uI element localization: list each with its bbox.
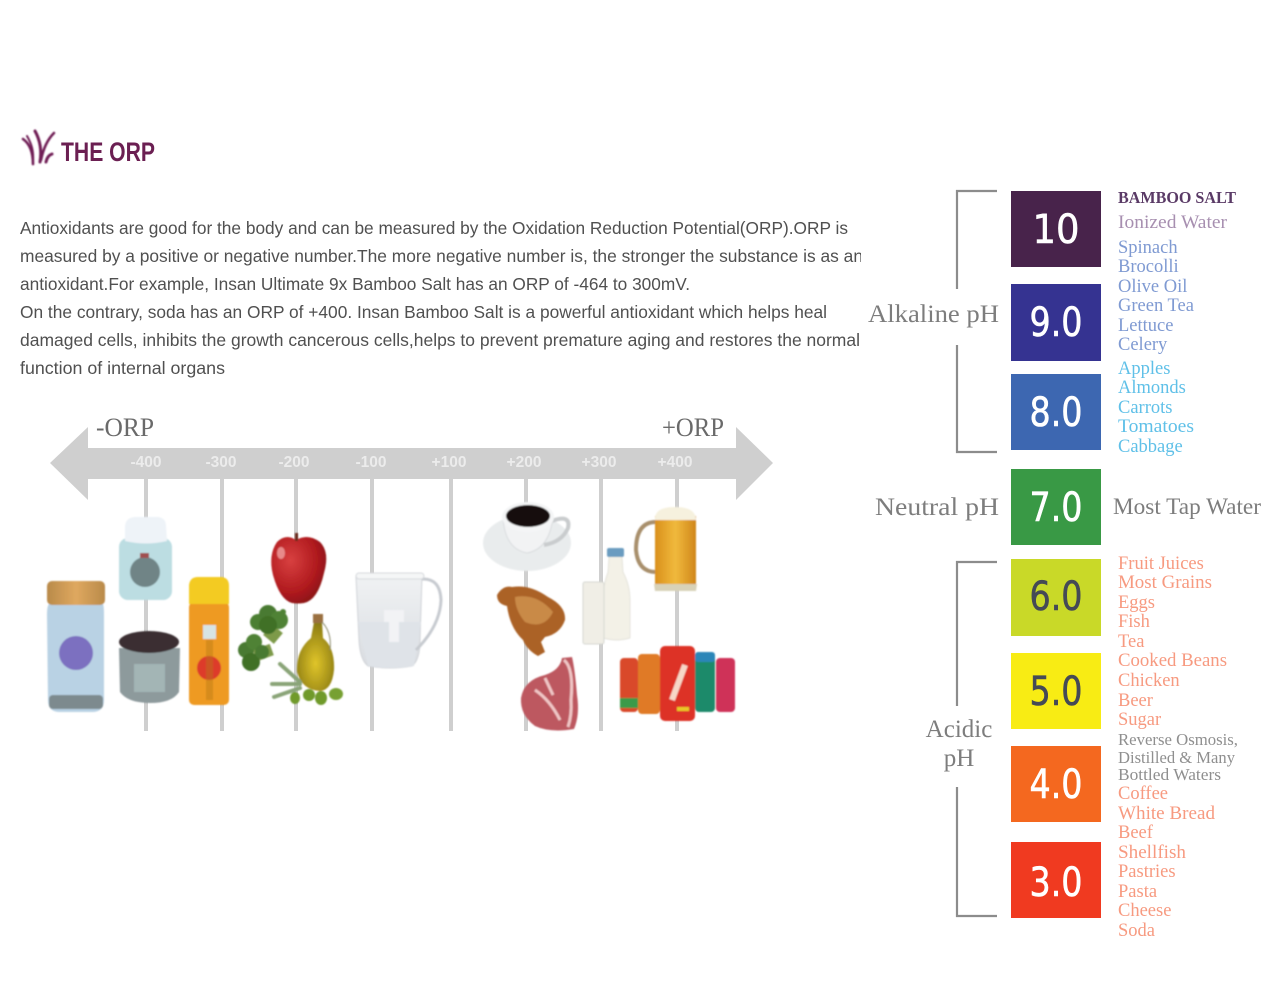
list: pH 8 items: Almonds: [1118, 378, 1186, 398]
list: pH 9 items: Green Tea: [1118, 296, 1194, 316]
list: pH 8 items: Cabbage: [1118, 437, 1183, 457]
list: pH 9 items: Olive Oil: [1118, 277, 1187, 297]
pH block 9.0: [1011, 284, 1101, 361]
list: bottled waters: Bottled Waters: [1118, 765, 1221, 784]
text block: antioxidant explanation: Antioxidants are good for the body and can be measured by the Oxidation Reduction Potential(ORP).ORP is: [20, 218, 848, 238]
icon: soda cans: [620, 646, 735, 721]
list: bottled waters: Distilled & Many: [1118, 748, 1236, 767]
list: acidic foods upper: Chicken: [1118, 671, 1180, 691]
icon: coffee cup on saucer: [483, 502, 571, 571]
scale numbers: [130, 454, 692, 471]
list: acidic foods lower: Pastries: [1118, 862, 1176, 882]
pH block 9.0: 9.0: [1030, 300, 1082, 346]
bracket: acidic: [957, 562, 997, 916]
pH block 8.0: [1011, 374, 1101, 450]
list: pH 9 items: [1118, 238, 1194, 355]
label: acidic pH: [926, 716, 992, 772]
text block: antioxidant explanation: damaged cells, inhibits the growth cancerous cells,helps to prevent premature aging and restores the normal: [20, 330, 860, 350]
icon: milk bottle and glass: [583, 548, 630, 644]
scale numbers: -300: [205, 454, 237, 471]
scale numbers: -200: [278, 454, 310, 471]
label: acidic pH: pH: [944, 745, 974, 772]
list: acidic foods lower: Soda: [1118, 921, 1155, 941]
list: pH 8 items: Carrots: [1118, 398, 1172, 418]
list: pH 10 items: Ionized Water: [1118, 213, 1227, 233]
text block: antioxidant explanation: On the contrary, soda has an ORP of +400. Insan Bamboo Salt is a powerful antioxidant which helps heal: [20, 302, 827, 322]
pH block 6.0: 6.0: [1030, 574, 1082, 620]
double arrow: [50, 427, 773, 500]
icon: roast chicken: [497, 586, 565, 656]
tick lines: [144, 478, 679, 731]
list: acidic foods lower: Beef: [1118, 823, 1154, 843]
list: acidic foods lower: Pasta: [1118, 882, 1157, 902]
scale numbers: +200: [507, 454, 541, 471]
list: bottled waters: [1118, 730, 1238, 784]
label: most tap water: Most Tap Water: [1113, 494, 1261, 519]
list: pH 9 items: Brocolli: [1118, 257, 1179, 277]
icon: grass leaves: [23, 131, 54, 164]
label: -ORP: -ORP: [96, 413, 154, 442]
list: acidic foods lower: White Bread: [1118, 804, 1216, 824]
scale numbers: +400: [658, 454, 692, 471]
list: acidic foods upper: Beer: [1118, 691, 1153, 711]
bracket: alkaline: [957, 191, 997, 452]
list: pH 8 items: Apples: [1118, 359, 1170, 379]
list: pH 9 items: Celery: [1118, 335, 1168, 355]
heading text: THE ORP: [61, 137, 155, 167]
list: acidic foods lower: [1118, 784, 1216, 941]
list: acidic foods upper: [1118, 554, 1227, 730]
list: bottled waters: Reverse Osmosis,: [1118, 730, 1238, 749]
list: acidic foods upper: Fruit Juices: [1118, 554, 1204, 574]
scale numbers: -400: [130, 454, 162, 471]
pH block 7.0: 7.0: [1030, 485, 1082, 531]
list: pH 9 items: Spinach: [1118, 238, 1178, 258]
list: acidic foods lower: Shellfish: [1118, 843, 1186, 863]
icon: large jar with gold lid: [47, 581, 105, 712]
pH block 3.0: 3.0: [1030, 860, 1082, 906]
list: acidic foods lower: Cheese: [1118, 901, 1171, 921]
scale numbers: +100: [432, 454, 466, 471]
list: pH 8 items: Tomatoes: [1118, 417, 1194, 437]
icon: dark-lid jar: [119, 631, 180, 703]
label: neutral pH: Neutral pH: [875, 494, 999, 521]
list: acidic foods upper: Most Grains: [1118, 573, 1212, 593]
icon: water pitcher: [356, 573, 441, 668]
scale numbers: -100: [355, 454, 387, 471]
list: acidic foods upper: Eggs: [1118, 593, 1155, 613]
list: acidic foods upper: Sugar: [1118, 710, 1161, 730]
list: acidic foods upper: Cooked Beans: [1118, 651, 1227, 671]
icon: yellow-capped shaker: [189, 577, 229, 705]
label: +ORP: +ORP: [662, 413, 724, 442]
pH block 6.0: [1011, 559, 1101, 636]
list: acidic foods upper: Tea: [1118, 632, 1144, 652]
text block: antioxidant explanation: antioxidant.For example, Insan Ultimate 9x Bamboo Salt has an ORP of -464 to 300mV.: [20, 274, 690, 294]
text block: antioxidant explanation: [20, 218, 863, 378]
list: pH 10 items: BAMBOO SALT: [1118, 188, 1237, 207]
pH block 8.0: 8.0: [1030, 390, 1082, 436]
list: pH 10 items: [1118, 188, 1237, 233]
chart: pH scale: [868, 188, 1261, 941]
icon: beer mug: [636, 507, 697, 591]
pH block 3.0: [1011, 842, 1101, 918]
text block: antioxidant explanation: measured by a positive or negative number.The more negative number is, the stronger the substance is as an: [20, 246, 863, 266]
pH block 5.0: [1011, 653, 1101, 729]
label: alkaline pH: Alkaline pH: [868, 301, 999, 328]
icon: olive oil bottle and olives: [272, 614, 343, 705]
icon: apple: [271, 533, 326, 604]
list: pH 8 items: [1118, 359, 1194, 457]
icon: broccoli: [238, 605, 288, 671]
chart: ORP scale: [47, 413, 773, 731]
pH block 10: [1011, 191, 1101, 267]
pH block 10: 10: [1032, 207, 1080, 253]
icon: white-capped bottle: [119, 517, 172, 600]
list: pH 9 items: Lettuce: [1118, 316, 1173, 336]
scale numbers: +300: [582, 454, 616, 471]
icon: raw steak: [521, 657, 578, 730]
pH block 4.0: [1011, 746, 1101, 822]
pH block 5.0: 5.0: [1030, 669, 1082, 715]
list: acidic foods upper: Fish: [1118, 612, 1150, 632]
pH block 7.0: [1011, 469, 1101, 545]
text block: antioxidant explanation: function of internal organs: [20, 358, 225, 378]
pH block 4.0: 4.0: [1030, 762, 1082, 808]
logo: THE ORP heading: [23, 131, 155, 167]
label: acidic pH: Acidic: [926, 716, 992, 743]
list: acidic foods lower: Coffee: [1118, 784, 1168, 804]
